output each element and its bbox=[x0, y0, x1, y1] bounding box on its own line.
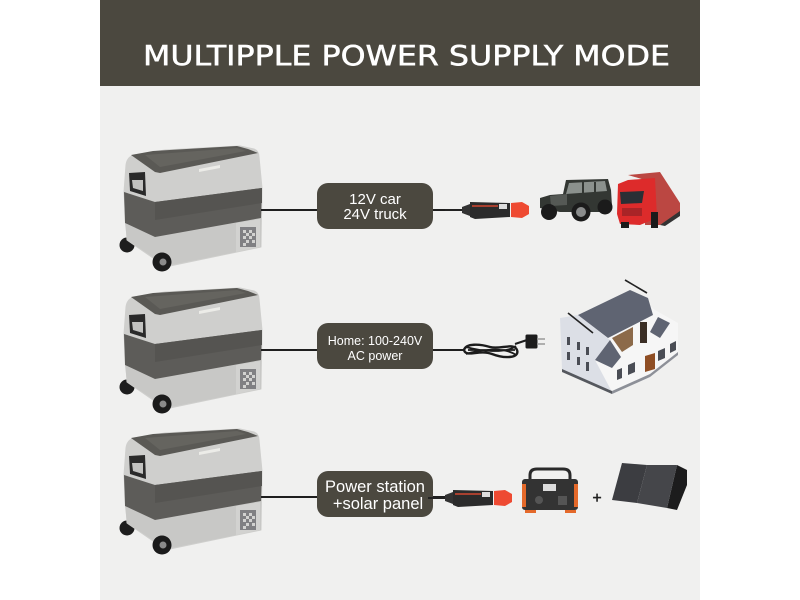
label: 12V car 24V truck: 12V car bbox=[349, 191, 401, 208]
connector line 2 bbox=[261, 349, 465, 351]
connector line 3 bbox=[261, 496, 445, 498]
row 2: home AC power bbox=[120, 280, 678, 414]
connector line 1 bbox=[261, 209, 462, 211]
label: Home 100-240V AC power bbox=[317, 323, 433, 369]
label: Power station +solar panel bbox=[317, 471, 433, 517]
row 1: car and truck power bbox=[120, 146, 680, 272]
icon: car plug bbox=[445, 202, 529, 219]
label: 12V car 24V truck bbox=[317, 183, 433, 229]
row 3: power station and solar bbox=[120, 429, 687, 554]
label: Home 100-240V AC power: Home: 100-240V bbox=[328, 334, 423, 348]
icon: solar panel bbox=[612, 463, 687, 510]
icon: car plug bbox=[428, 490, 512, 507]
label: Power station +solar panel: +solar panel bbox=[333, 495, 423, 513]
cooler 3 bbox=[120, 429, 262, 554]
icon: jeep bbox=[540, 179, 612, 222]
title: MULTIPPLE POWER SUPPLY MODE bbox=[143, 39, 670, 72]
label: Power station +solar panel: Power station bbox=[325, 478, 425, 496]
cooler 2 bbox=[120, 288, 262, 414]
cooler 1 bbox=[120, 146, 262, 272]
icon: power station bbox=[522, 469, 578, 513]
label: Home 100-240V AC power: AC power bbox=[348, 349, 402, 363]
icon: red truck bbox=[617, 172, 680, 228]
plus sign: + bbox=[592, 490, 602, 507]
panel: background bbox=[100, 0, 700, 600]
icon: house bbox=[560, 280, 678, 394]
label: 12V car 24V truck: 24V truck bbox=[343, 206, 407, 223]
icon: coiled AC cord and plug bbox=[464, 335, 545, 357]
header banner bbox=[100, 0, 700, 86]
